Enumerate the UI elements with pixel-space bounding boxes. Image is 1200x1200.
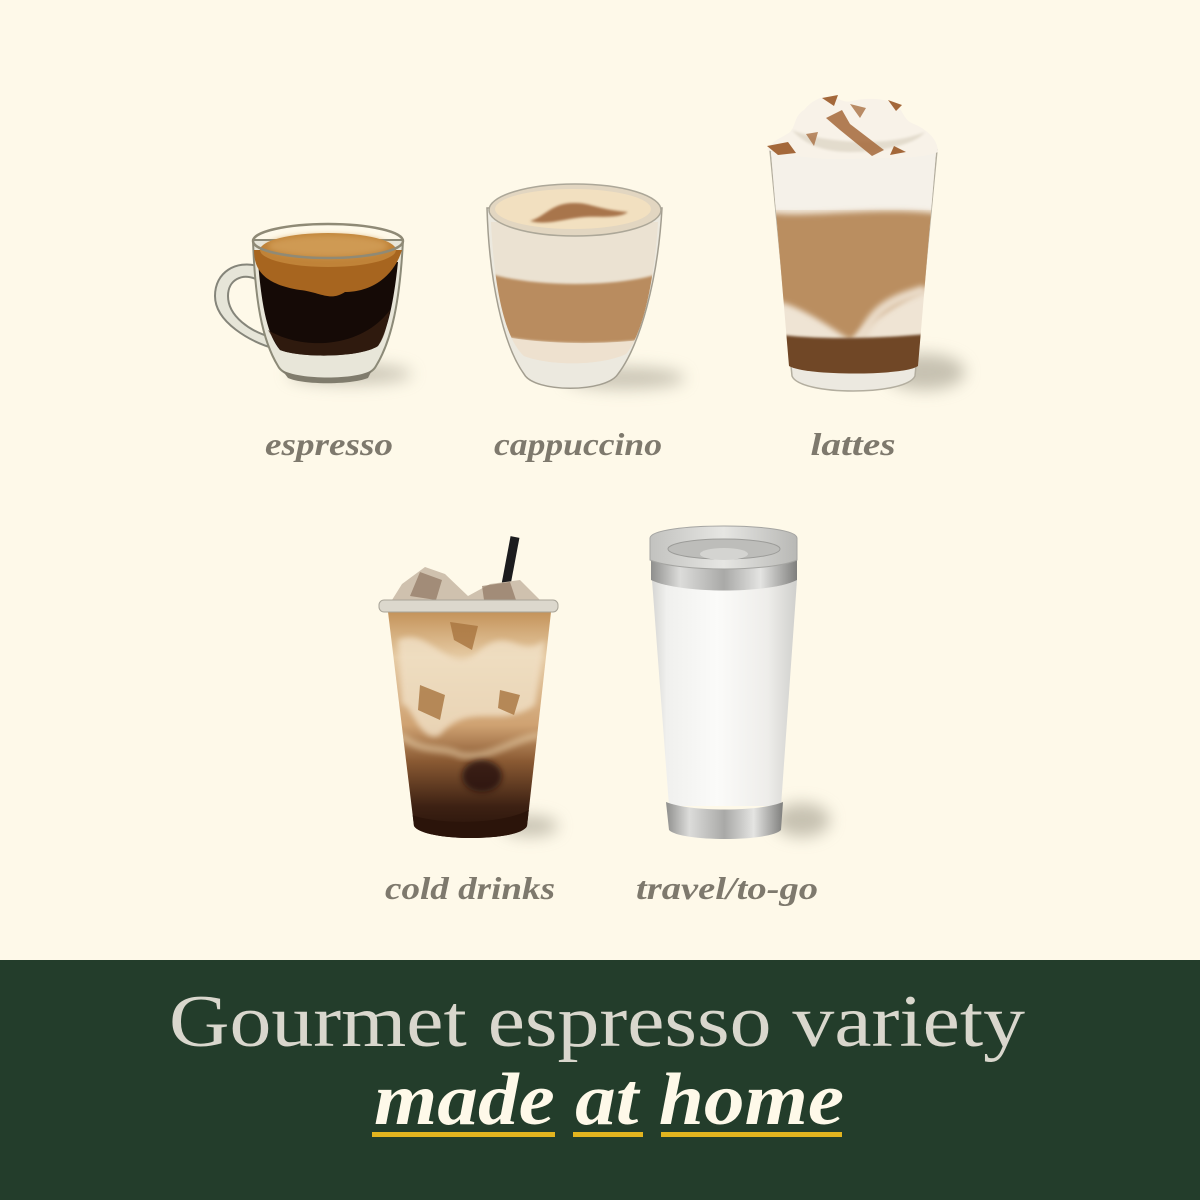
icon: travel tumbler (650, 526, 830, 839)
label: cappuccino: cappuccino (494, 426, 662, 462)
icon: espresso cup (215, 224, 412, 384)
label: travel/to-go: travel/to-go (636, 870, 818, 906)
icon: iced coffee cup (379, 537, 558, 845)
label: espresso: espresso (265, 426, 393, 462)
icon: cappuccino glass (480, 184, 685, 389)
underlines (372, 1132, 842, 1137)
heading line one: Gourmet espresso variety (169, 981, 1025, 1063)
label: lattes: lattes (810, 426, 896, 462)
icon: latte glass (765, 95, 965, 391)
panel: bottom banner (0, 960, 1200, 1200)
label: cold drinks: cold drinks (385, 870, 555, 906)
heading line two: made at home (374, 1059, 844, 1141)
